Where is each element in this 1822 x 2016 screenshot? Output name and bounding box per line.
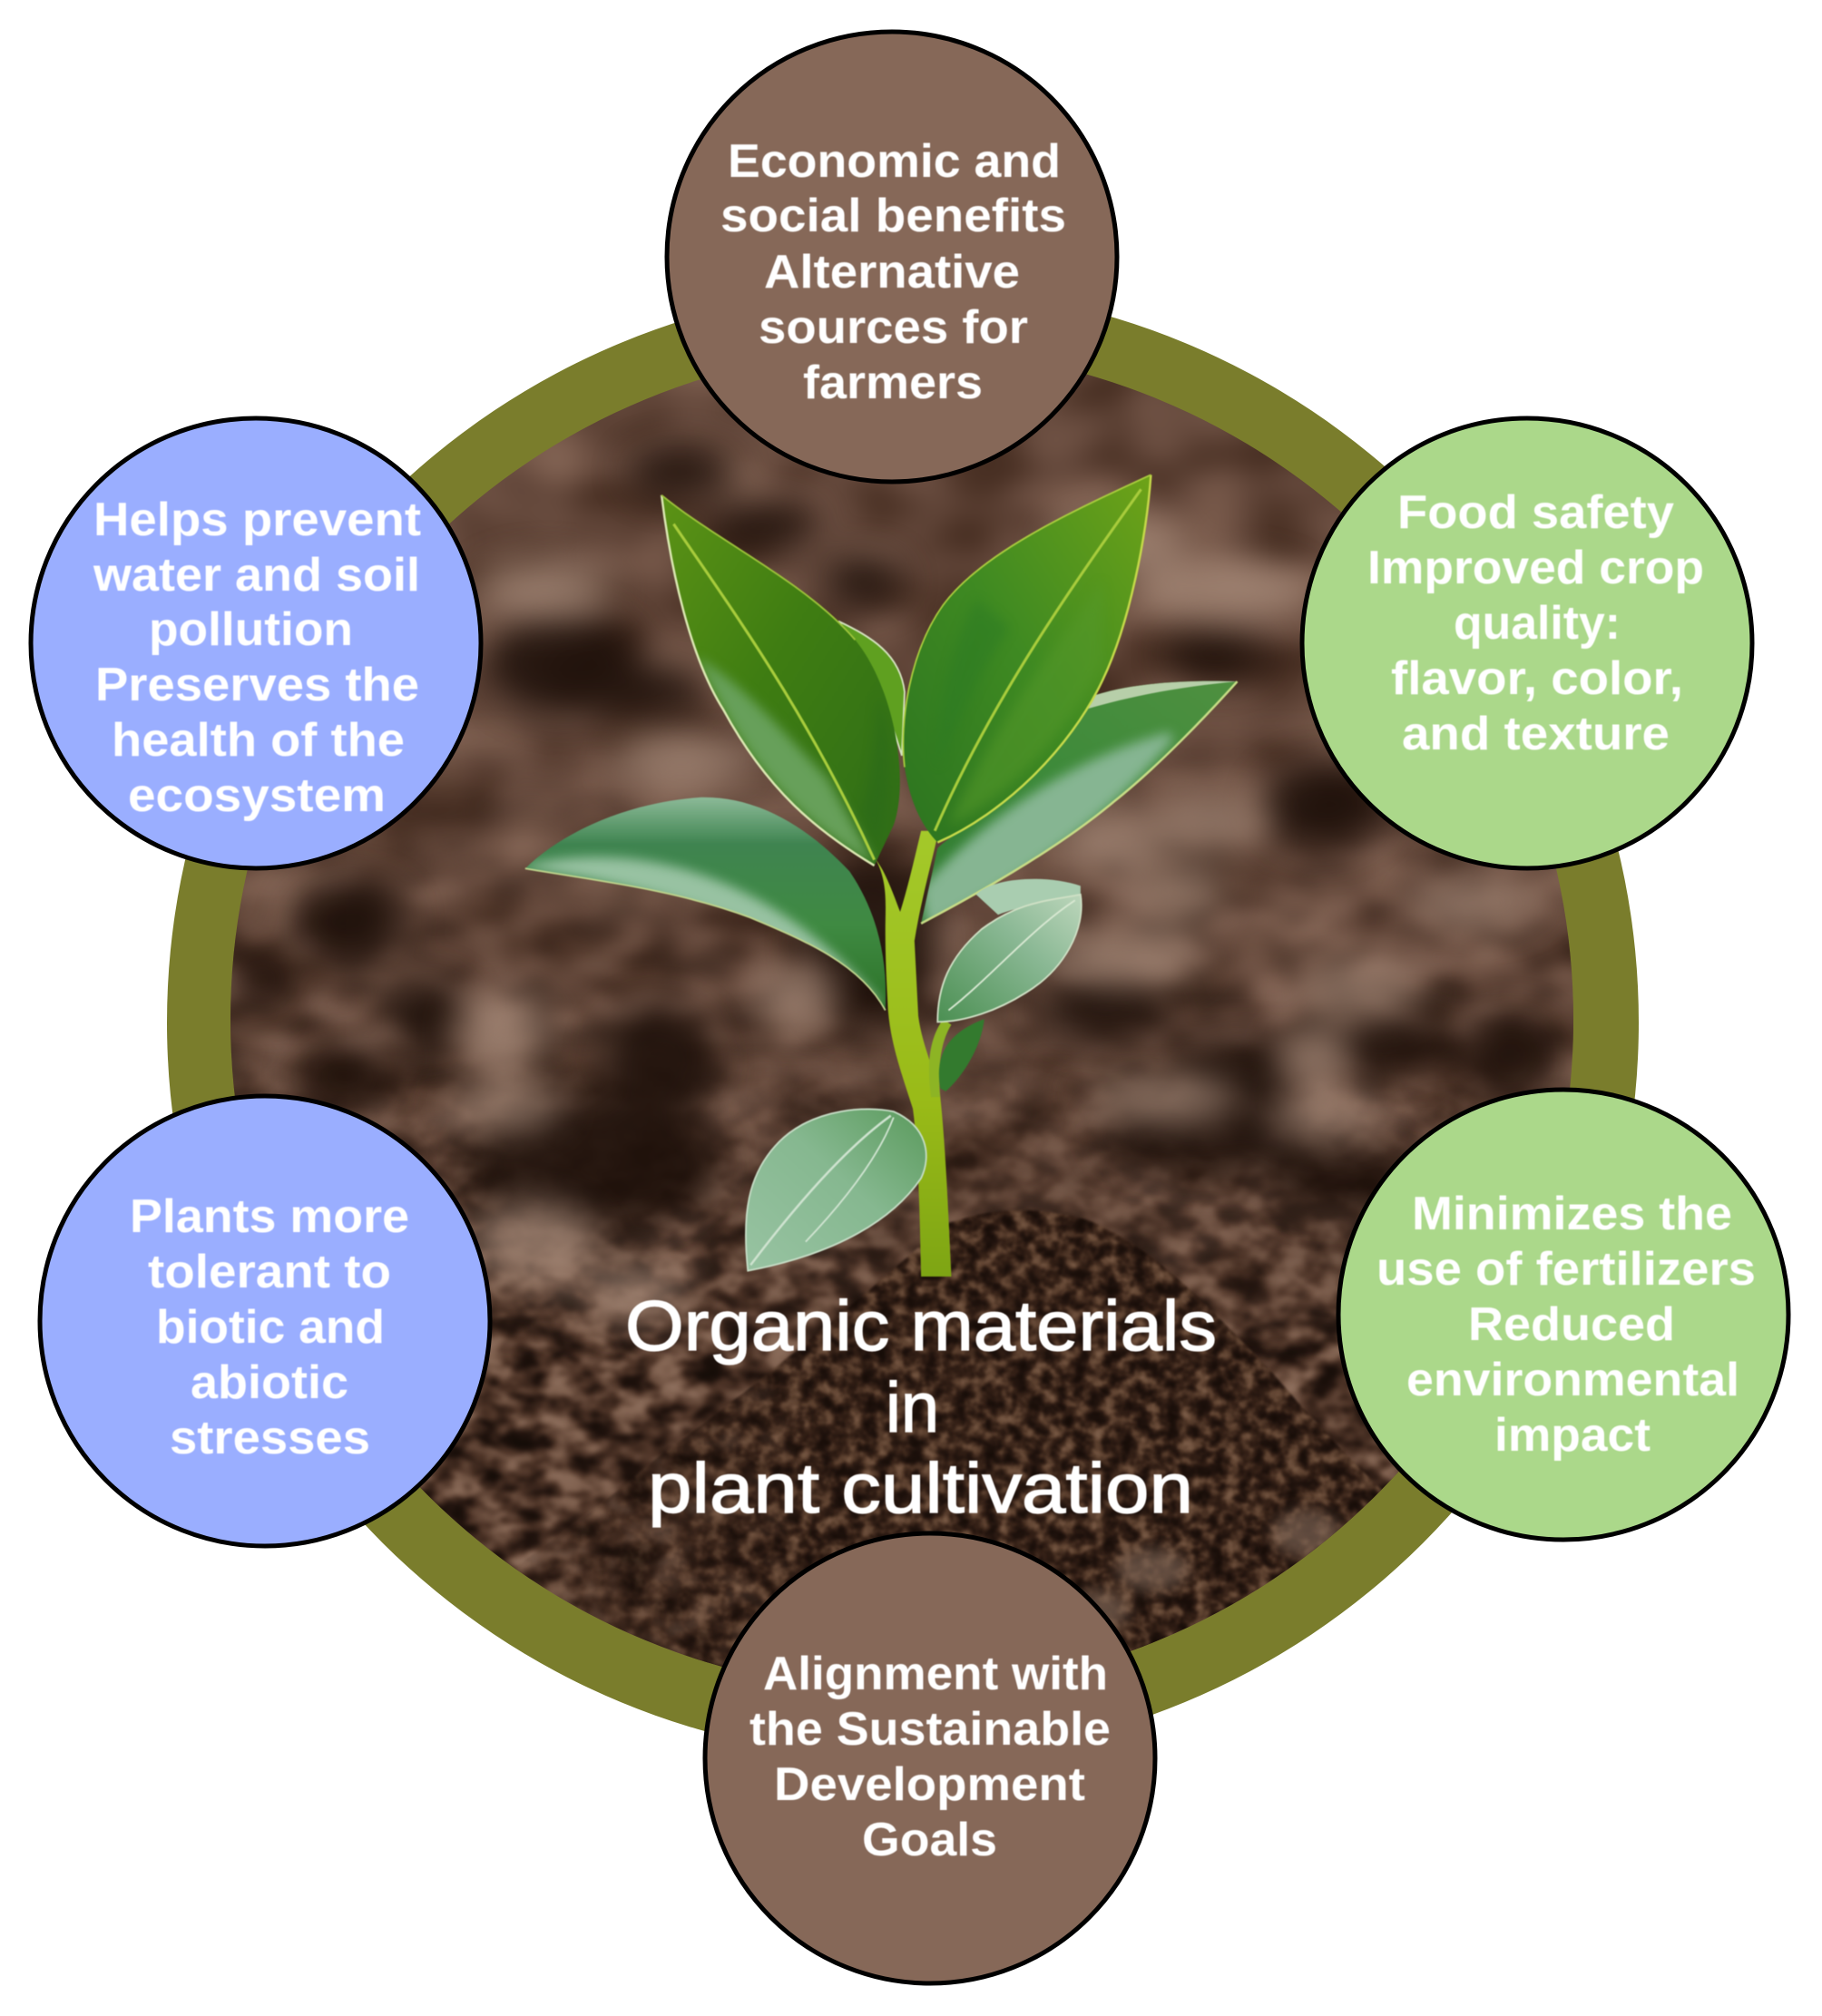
text: pollution prevention: water and soil xyxy=(93,549,420,602)
text: food safety xyxy=(1367,486,1704,760)
text: pollution prevention xyxy=(93,494,421,822)
text: sustainable development goals: the Sustainable xyxy=(749,1703,1111,1756)
panel: stress tolerance xyxy=(40,1096,490,1546)
dark hollows in the soil xyxy=(230,446,1557,1235)
right lower leaf xyxy=(921,681,1238,929)
back small leaf xyxy=(838,621,905,756)
text: food safety: flavor, color, xyxy=(1391,652,1683,705)
small dark leaf xyxy=(939,1019,984,1091)
photo: blurred soil background xyxy=(230,374,1573,1667)
text: sustainable development goals: Alignment with xyxy=(763,1648,1108,1700)
text: fertilizer reduction: environmental xyxy=(1406,1354,1739,1406)
text: food safety: and texture xyxy=(1402,708,1670,760)
text: stress tolerance xyxy=(130,1190,409,1464)
text: sustainable development goals: Development xyxy=(774,1758,1085,1811)
text: sustainable development goals: Goals xyxy=(862,1814,997,1866)
text: stress tolerance: tolerant to xyxy=(148,1246,391,1298)
upper left leaf xyxy=(661,495,900,866)
text: fertilizer reduction: Minimizes the xyxy=(1412,1188,1732,1240)
bottom leaf xyxy=(746,1109,926,1271)
panel: economic and social benefits xyxy=(667,32,1117,482)
text: pollution prevention: ecosystem xyxy=(128,769,386,822)
panel: food safety xyxy=(1302,418,1752,868)
heading: central title: Organic materials xyxy=(625,1286,1217,1365)
text: stress tolerance: stresses xyxy=(170,1412,370,1464)
text: fertilizer reduction: impact xyxy=(1494,1409,1651,1462)
text: economic benefits: Alternative xyxy=(764,246,1020,298)
text: stress tolerance: Plants more xyxy=(130,1190,409,1243)
panel: olive ring xyxy=(167,287,1639,1758)
panel: fertilizer reduction xyxy=(1338,1090,1788,1540)
text: food safety: Food safety xyxy=(1397,486,1674,539)
panel: sustainable development goals xyxy=(705,1533,1155,1983)
text: economic benefits: social benefits xyxy=(720,190,1066,242)
text: fertilizer reduction xyxy=(1376,1188,1756,1462)
text: food safety: Improved crop xyxy=(1367,542,1704,594)
illustration: green seedling xyxy=(525,475,1238,1277)
curled right leaf xyxy=(937,879,1082,1022)
stems xyxy=(876,831,951,1277)
text: food safety: quality: xyxy=(1454,597,1621,650)
text: economic benefits: farmers xyxy=(803,357,983,409)
heading: central title: in xyxy=(886,1367,939,1447)
panel: pollution prevention xyxy=(31,418,481,868)
text: stress tolerance: abiotic xyxy=(191,1356,348,1409)
lighter clods in the soil xyxy=(444,514,1543,1322)
text: economic benefits: sources for xyxy=(759,301,1028,354)
upper right leaf xyxy=(903,475,1151,842)
text: pollution prevention: health of the xyxy=(112,714,405,767)
text: fertilizer reduction: Reduced xyxy=(1468,1298,1675,1351)
soil mound under the seedling xyxy=(524,1209,1381,1666)
text: fertilizer reduction: use of fertilizers xyxy=(1376,1243,1756,1296)
pebbles at the foot of the mound xyxy=(1066,1510,1341,1630)
left big leaf xyxy=(525,798,886,1011)
heading: central title: plant cultivation xyxy=(648,1448,1193,1528)
heading: central title xyxy=(625,1286,1217,1528)
text: economic benefits xyxy=(720,135,1066,409)
text: pollution prevention: Preserves the xyxy=(95,659,419,711)
text: pollution prevention: pollution xyxy=(149,603,353,656)
text: stress tolerance: biotic and xyxy=(156,1301,385,1354)
text: economic benefits: Economic and xyxy=(728,135,1061,188)
text: sustainable development goals xyxy=(749,1648,1111,1866)
text: pollution prevention: Helps prevent xyxy=(93,494,421,546)
